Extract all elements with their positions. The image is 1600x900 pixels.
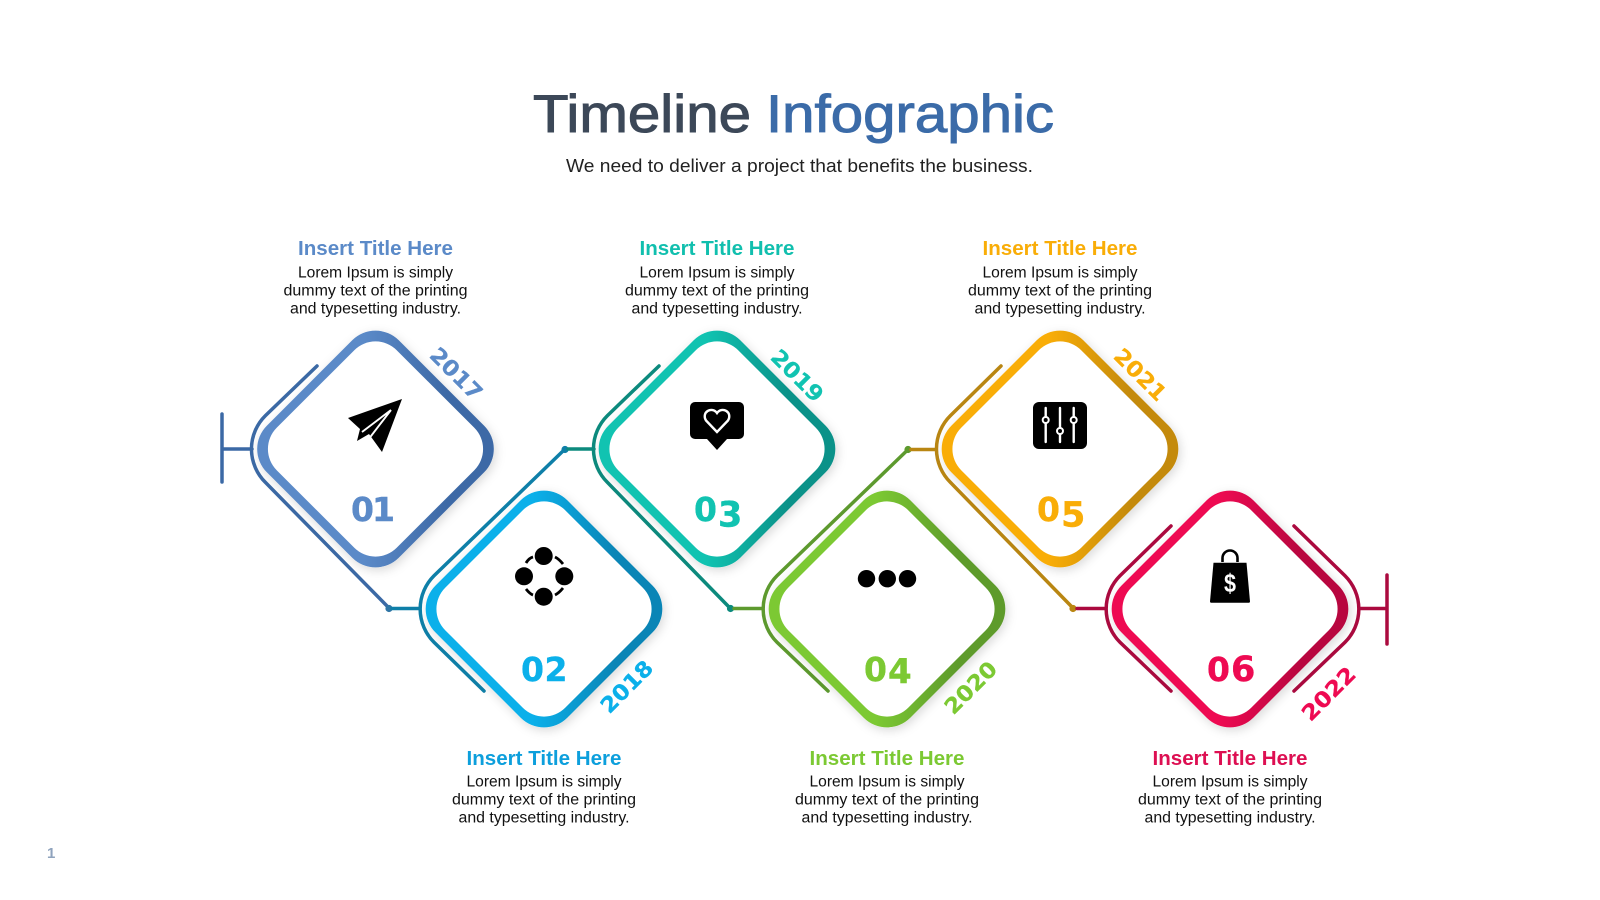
text block 06: Lorem Ipsum is simply	[1152, 774, 1308, 790]
icon: three dots	[858, 570, 916, 587]
diamond 01	[257, 331, 494, 567]
text block 01: Insert Title Here	[298, 237, 453, 260]
step 04	[734, 446, 1005, 826]
number 04: 0	[864, 650, 887, 689]
text block 04: Insert Title Here	[810, 747, 964, 770]
text block 02: Insert Title Here	[466, 747, 622, 770]
text block 02: Lorem Ipsum is simply	[466, 774, 622, 790]
title: Timeline	[533, 85, 751, 144]
connector 02	[392, 451, 563, 691]
text block 06: dummy text of the printing	[1138, 792, 1322, 808]
icon: money bag	[1210, 550, 1250, 603]
connector 03	[568, 366, 728, 606]
text block 05: and typesetting industry.	[974, 300, 1146, 318]
diamond 02	[426, 491, 662, 727]
icon: money bag: $	[1224, 568, 1236, 598]
number 06: 6	[1231, 650, 1255, 690]
year 2018: 2018	[596, 656, 659, 719]
number 05: 0	[1037, 490, 1060, 529]
dot 01	[385, 605, 393, 612]
year 2020: 2020	[940, 657, 1003, 720]
icon: paper plane	[348, 399, 402, 452]
dot 04	[904, 446, 912, 453]
icon: heart bubble	[690, 402, 744, 450]
text block 06: and typesetting industry.	[1144, 810, 1316, 826]
text block 03	[625, 237, 809, 318]
diamond 03	[599, 331, 835, 567]
connector 01	[222, 366, 387, 606]
number 03: 0	[694, 490, 717, 529]
text block 05	[968, 237, 1152, 318]
year 2017: 2017	[424, 343, 487, 406]
text block 05: Lorem Ipsum is simply	[982, 264, 1138, 282]
title	[533, 85, 1054, 144]
text block 06: Insert Title Here	[1152, 747, 1308, 770]
year 2022: 2022	[1297, 662, 1362, 727]
step 06	[1077, 491, 1387, 826]
step 03	[568, 237, 835, 612]
title: Infographic	[766, 85, 1054, 144]
diamond 06	[1112, 491, 1348, 727]
number 05: 5	[1061, 496, 1085, 536]
dot 05	[1069, 605, 1077, 612]
text block 03: Lorem Ipsum is simply	[640, 264, 795, 282]
text block 01: dummy text of the printing	[284, 282, 468, 300]
number 03: 3	[718, 496, 742, 536]
text block 01	[284, 237, 468, 318]
text block 01: and typesetting industry.	[290, 300, 461, 318]
text block 04: dummy text of the printing	[795, 792, 979, 808]
step 05	[911, 237, 1178, 612]
text block 01: Lorem Ipsum is simply	[298, 264, 453, 282]
text block 02	[452, 747, 636, 826]
page number: 1	[47, 845, 55, 862]
number 04: 4	[888, 652, 912, 692]
step 01	[222, 237, 494, 612]
number 02: 0	[521, 650, 544, 689]
number 01: 0	[351, 490, 374, 529]
number 02: 2	[544, 650, 567, 689]
number 06: 0	[1207, 650, 1230, 689]
subtitle: We need to deliver a project that benefits the business.	[566, 155, 1033, 176]
step 02	[392, 446, 662, 826]
text block 02: and typesetting industry.	[458, 810, 630, 826]
text block 03: and typesetting industry.	[632, 300, 802, 318]
text block 04	[795, 747, 979, 826]
diamond 04	[769, 491, 1005, 727]
text block 06	[1138, 747, 1322, 826]
text block 03: Insert Title Here	[640, 237, 794, 260]
text block 05: Insert Title Here	[982, 237, 1138, 260]
dot 02	[561, 446, 569, 453]
connector 05	[911, 366, 1071, 606]
connector 06	[1077, 526, 1387, 691]
text block 02: dummy text of the printing	[452, 792, 636, 808]
text block 04: Lorem Ipsum is simply	[810, 774, 965, 790]
icon: network	[515, 547, 573, 606]
connector 04	[734, 452, 906, 691]
year 2019: 2019	[765, 345, 828, 408]
dot 03	[727, 605, 734, 612]
diamond 05	[942, 331, 1178, 567]
text block 05: dummy text of the printing	[968, 282, 1152, 300]
number 01: 1	[372, 490, 395, 529]
year 2021: 2021	[1108, 344, 1171, 407]
icon: sliders	[1033, 402, 1087, 449]
text block 04: and typesetting industry.	[802, 810, 972, 826]
text block 03: dummy text of the printing	[625, 282, 809, 300]
